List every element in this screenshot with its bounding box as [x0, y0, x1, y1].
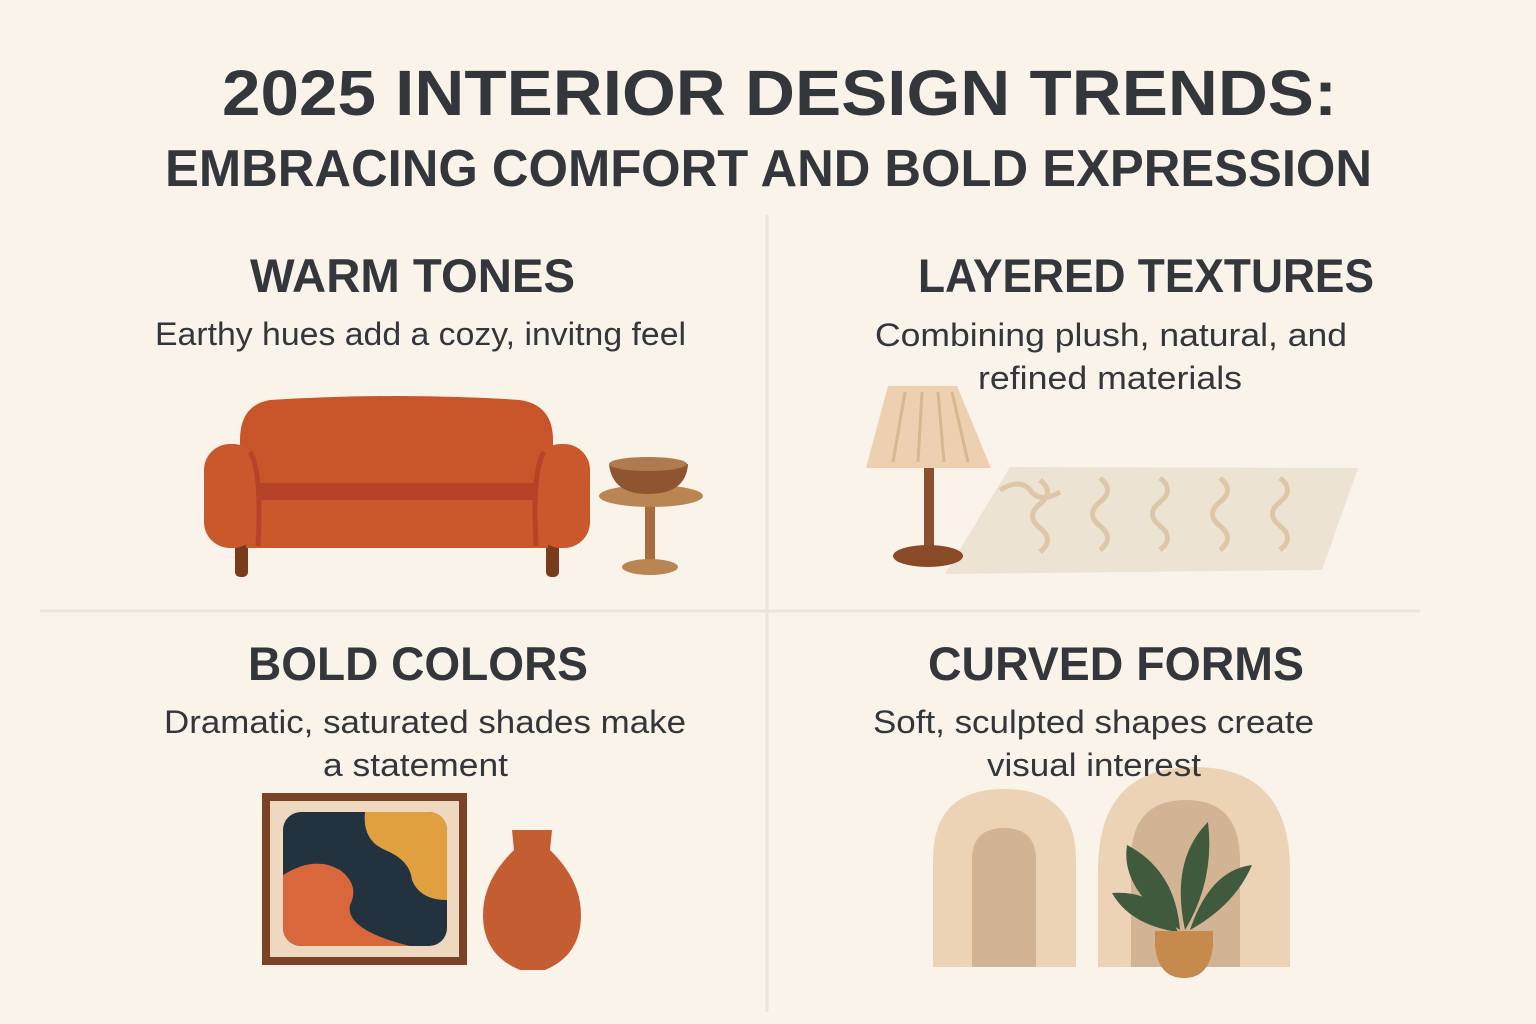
subtitle: EMBRACING COMFORT AND BOLD EXPRESSION — [165, 140, 1372, 198]
text: curved forms description: Soft, sculpted shapes create — [873, 704, 1314, 740]
panel: bold colors — [164, 637, 686, 970]
text: bold colors description: Dramatic, saturated shades make — [164, 704, 686, 740]
text: layered textures description: refined materials — [978, 360, 1242, 396]
text: curved forms description — [873, 704, 1314, 783]
heading: warm tones: WARM TONES — [250, 249, 575, 302]
text: curved forms description: visual interest — [987, 747, 1201, 783]
icon: side table with bowl — [599, 457, 703, 575]
icon: framed abstract art — [262, 793, 467, 965]
panel: warm tones — [155, 249, 703, 577]
title — [165, 57, 1372, 198]
text: bold colors description: a statement — [323, 747, 508, 783]
text: bold colors description — [164, 704, 686, 783]
heading: curved forms: CURVED FORMS — [928, 637, 1304, 690]
icon: vase — [483, 830, 581, 970]
panel: layered textures — [866, 249, 1374, 574]
panel: curved forms — [873, 637, 1314, 978]
heading: layered textures: LAYERED TEXTURES — [918, 249, 1374, 302]
icon: rug — [945, 467, 1358, 574]
icon: lamp — [866, 386, 991, 567]
text: layered textures description: Combining plush, natural, and — [875, 317, 1347, 353]
title: 2025 INTERIOR DESIGN TRENDS: — [222, 57, 1337, 129]
icon: arches with plant — [933, 767, 1290, 978]
heading: bold colors: BOLD COLORS — [248, 637, 588, 690]
icon: sofa — [204, 396, 590, 577]
text: warm tones description: Earthy hues add a cozy, invitng feel — [155, 316, 686, 352]
text: layered textures description — [875, 317, 1347, 396]
